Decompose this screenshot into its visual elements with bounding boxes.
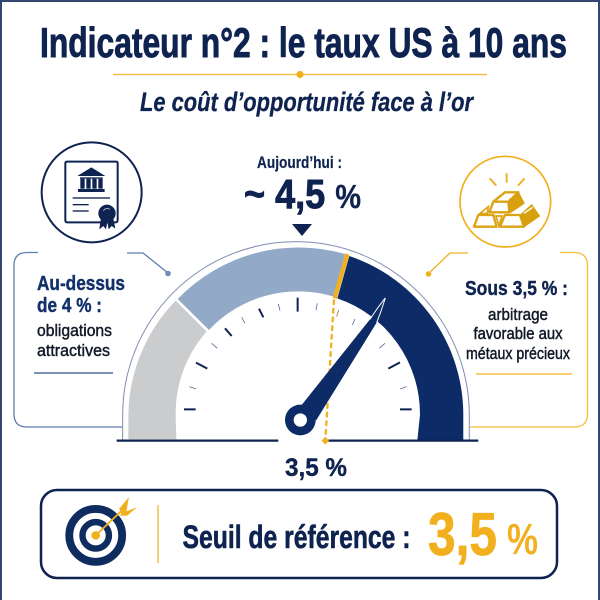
body: obligations: obligations	[37, 321, 112, 340]
threshold label: 3,5 %	[285, 454, 347, 482]
needle	[285, 298, 385, 435]
threshold divider	[335, 254, 347, 298]
gauge zone: grey	[128, 301, 207, 439]
panel: above 4%: de 4 % :	[37, 295, 102, 317]
icon: bond certificate	[42, 142, 142, 242]
panel: below 3.5%: favorable aux	[474, 325, 563, 343]
callout: reference threshold	[41, 490, 557, 578]
value: 3,5 %: 3,5	[428, 501, 497, 568]
threshold dashed line	[325, 299, 334, 441]
callout: reference threshold: %	[507, 515, 538, 564]
heading: au-dessus: Au-dessus	[37, 273, 125, 295]
bottom right bar	[500, 215, 524, 227]
value: 4,5 %: ~ 4,5 %	[244, 171, 361, 217]
label: aujourd'hui: Aujourd’hui :	[257, 153, 342, 172]
label: seuil de référence: Seuil de référence :	[182, 519, 410, 555]
gauge zone: light blue	[178, 247, 345, 330]
icon: target	[69, 497, 137, 562]
panel: below 3.5%: métaux précieux	[466, 345, 571, 363]
gauge ticks	[184, 298, 412, 409]
gauge zone: dark blue	[337, 256, 463, 441]
panel: above 4%: attractives	[37, 341, 110, 360]
body: arbitrage: arbitrage	[488, 306, 548, 324]
title divider	[113, 71, 487, 78]
icon: gold bars	[460, 156, 551, 247]
top bar	[489, 192, 518, 212]
bottom left bar	[474, 215, 497, 227]
baseline	[117, 437, 478, 444]
panel: below 3.5%	[426, 252, 588, 427]
current value: Aujourd'hui	[244, 153, 361, 236]
marker triangle	[292, 224, 312, 236]
heading: sous 3,5 %: Sous 3,5 % :	[465, 278, 568, 300]
gauge	[117, 242, 478, 445]
panel: above 4%	[14, 252, 171, 427]
subtitle: Le coût d’opportunité face à l’or	[140, 87, 474, 117]
